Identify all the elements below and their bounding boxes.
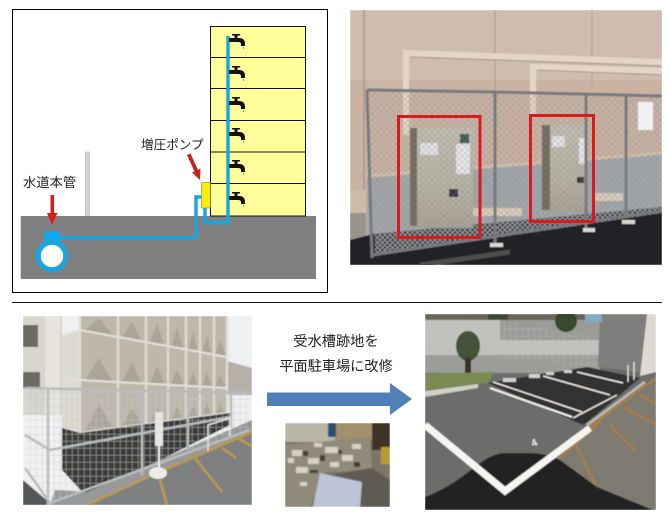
kerb [50, 420, 252, 505]
old yellow lines [556, 377, 656, 488]
panel: water supply diagram [12, 10, 328, 292]
trees [456, 331, 480, 375]
tank panel shading [85, 318, 226, 430]
red highlight boxes [398, 116, 594, 238]
chain-link fence [367, 92, 662, 256]
cabinet 2 [542, 125, 585, 212]
grass [425, 372, 495, 390]
arrow: before to after [267, 383, 412, 415]
caption [279, 334, 393, 375]
building [598, 314, 647, 372]
wheel stops [503, 370, 572, 382]
white posts [628, 362, 634, 382]
ground [350, 207, 662, 265]
label: water main: 水道本管 [23, 175, 76, 190]
fence feet [490, 220, 635, 247]
old parking surface [560, 380, 656, 510]
tank frame [62, 316, 227, 433]
caption: 平面駐車場に改修 [279, 358, 393, 375]
photo: completed flat parking lot [425, 310, 656, 510]
tank end face [62, 330, 80, 432]
water pipes [60, 36, 228, 238]
water main [38, 232, 66, 270]
arrow: booster pump [187, 154, 200, 180]
building with six floors [210, 26, 306, 216]
lower wall [367, 155, 662, 245]
fence [25, 390, 250, 503]
upper pipes [406, 53, 662, 135]
fence [425, 318, 600, 368]
ground [21, 216, 316, 279]
label: booster pump: 増圧ポンプ [141, 138, 204, 152]
kerb [587, 382, 645, 425]
foreground pavement [425, 388, 474, 398]
adjacent building [23, 316, 62, 415]
booster pump [202, 182, 210, 208]
faucets [229, 34, 245, 207]
parking bay lines [493, 372, 623, 418]
sign stand [149, 412, 167, 479]
cabinet 1 [410, 128, 473, 228]
yellow parking lines [87, 432, 252, 505]
tank [80, 316, 227, 433]
tank base shadow [62, 413, 230, 497]
lower pipes [473, 197, 623, 212]
white bay marking [425, 425, 590, 491]
asphalt new parking bays [488, 367, 640, 425]
divider [12, 302, 662, 303]
boundary pole [86, 152, 90, 216]
photo: demolition rubble [285, 423, 390, 507]
shadow [425, 453, 653, 510]
sign [638, 102, 653, 130]
background wall and road [425, 319, 600, 356]
photo: water tank before removal [23, 316, 252, 505]
bay number: 4 [530, 437, 540, 450]
photo: booster pump units behind fence [350, 10, 662, 265]
asphalt [87, 432, 252, 505]
arrow: water main [47, 195, 58, 225]
caption: 受水槽跡地を [293, 334, 379, 350]
